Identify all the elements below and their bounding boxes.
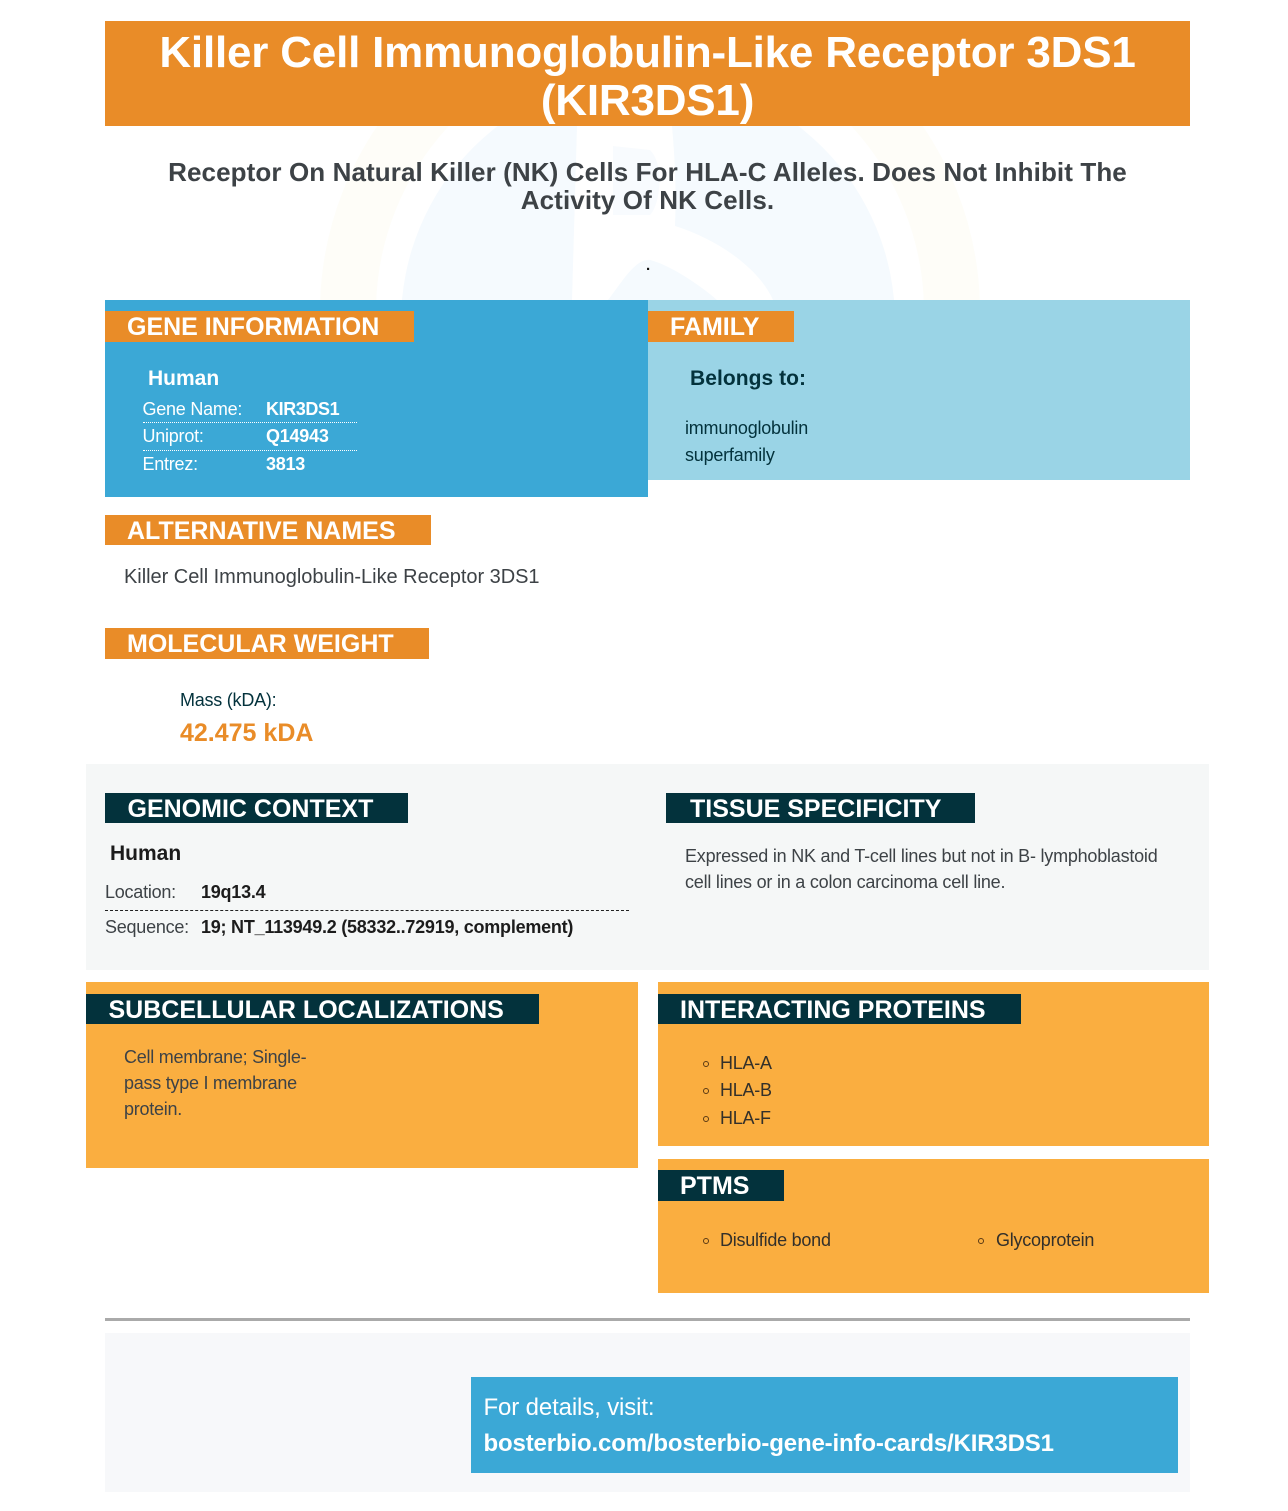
heading: genomic context: GENOMIC CONTEXT [128,795,373,823]
localization text: pass type I membrane [124,1073,297,1093]
panel: PTMs [658,1159,1209,1293]
call to action [471,1377,1178,1473]
panel: family [648,300,1190,480]
protein list: HLA-A [720,1052,772,1072]
alternative names text: Killer Cell Immunoglobulin-Like Receptor 3DS1 [124,566,540,588]
genomic data: 19; NT_113949.2 (58332..72919, complement) [201,917,573,937]
title banner: (KIR3DS1) [541,76,754,125]
title banner [105,21,1190,126]
heading: PTMs [658,1170,784,1201]
gene data table [142,399,357,474]
centered dot: . [646,257,650,274]
panel: interacting proteins [658,982,1209,1146]
heading: interacting proteins: INTERACTING PROTEINS [680,996,986,1024]
genomic data: 19q13.4 [201,882,265,902]
gene data table: Uniprot: [142,426,204,446]
heading: tissue specificity: TISSUE SPECIFICITY [690,795,941,823]
title banner: Killer Cell Immunoglobulin-Like Receptor 3DS1 [159,28,1136,77]
background watermark logo [402,126,894,300]
subtitle [168,157,1127,215]
PTM list [703,1230,1094,1250]
gene data table: 3813 [266,454,305,474]
genomic data: Location: [105,882,176,902]
species label: Human [148,367,219,390]
PTM list: Glycoprotein [996,1230,1094,1250]
panel: genomic context and tissue specificity [86,764,1209,970]
genomic data: Sequence: [105,917,189,937]
belongs to label: Belongs to: [690,367,806,390]
tissue specificity text [685,846,1158,892]
gene data table: Q14943 [266,426,329,446]
family text: immunoglobulin [685,418,808,438]
gene data table: KIR3DS1 [266,399,339,419]
heading: molecular weight: MOLECULAR WEIGHT [127,630,394,658]
molecular weight value: Mass (kDA): [180,690,276,710]
genomic data [105,882,629,937]
subtitle: Activity Of NK Cells. [521,185,774,215]
heading: family [648,311,794,342]
tissue specificity text: Expressed in NK and T-cell lines but not in B- lymphoblastoid [685,846,1158,866]
subtitle: Receptor On Natural Killer (NK) Cells For HLA-C Alleles. Does Not Inhibit The [168,157,1127,187]
gene data table: Gene Name: [142,399,242,419]
protein list [703,1052,772,1128]
panel: gene information [105,300,648,497]
heading: alternative names: ALTERNATIVE NAMES [127,517,396,545]
family text [685,418,808,465]
localization text: Cell membrane; Single- [124,1047,306,1067]
family text: superfamily [685,445,775,465]
heading: PTMs: PTMS [680,1172,749,1200]
protein list: HLA-F [720,1108,771,1128]
heading: subcellular localizations: SUBCELLULAR LOCALIZATIONS [108,996,504,1024]
panel: footer [105,1333,1190,1492]
molecular weight value [180,690,313,747]
tissue specificity text: cell lines or in a colon carcinoma cell line. [685,872,1005,892]
heading: family: FAMILY [670,313,759,341]
panel: subcellular localizations [86,982,638,1168]
call to action: For details, visit: [484,1394,654,1421]
PTM list: Disulfide bond [720,1230,831,1250]
mass value: 42.475 kDA [180,719,313,747]
details link: bosterbio.com/bosterbio-gene-info-cards/KIR3DS1 [484,1430,1054,1457]
localization text: protein. [124,1099,182,1119]
gene data table: Entrez: [142,454,198,474]
localization text [124,1047,306,1119]
species label: Human [110,842,181,865]
protein list: HLA-B [720,1080,772,1100]
heading: gene information: GENE INFORMATION [127,313,379,341]
